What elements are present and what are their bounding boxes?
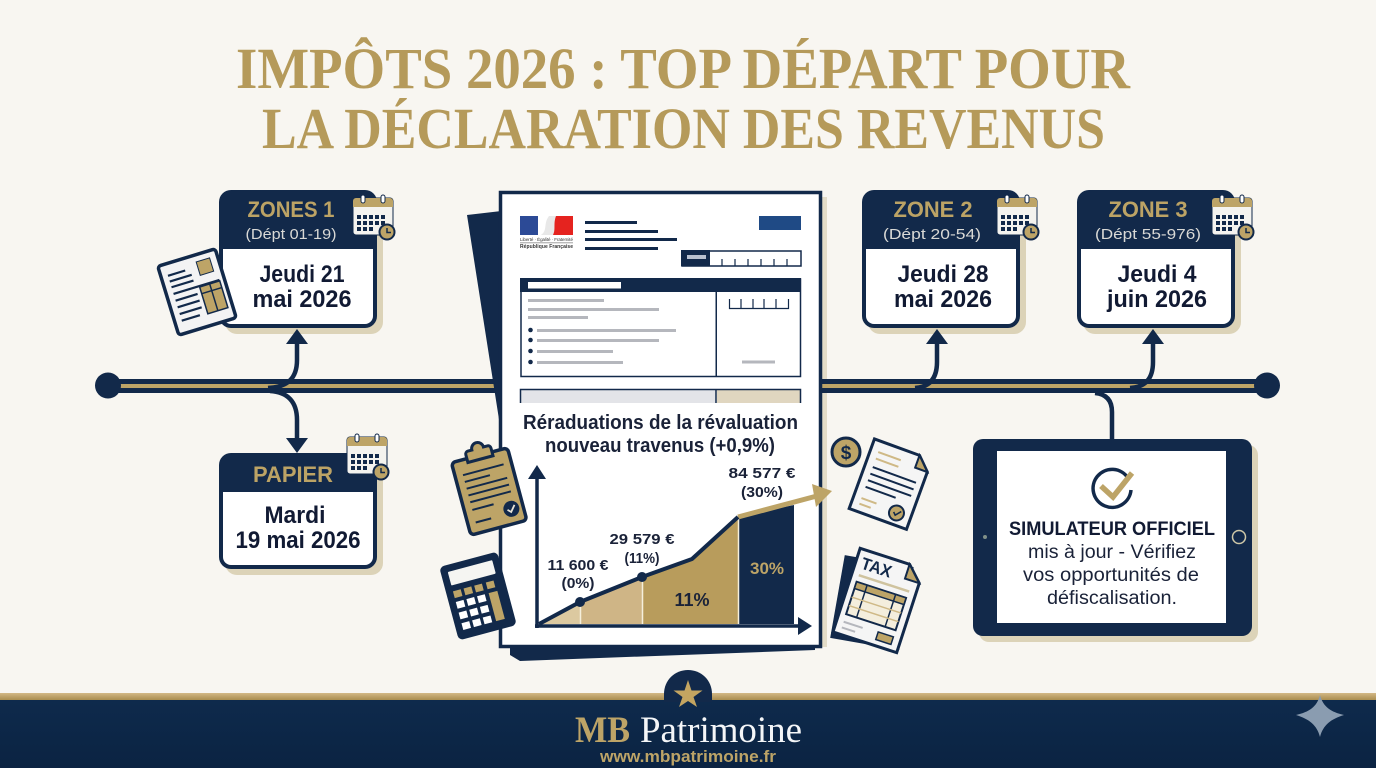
icon: calendar zone 3 xyxy=(1212,195,1254,240)
connector: timeline to simulator xyxy=(1095,393,1112,440)
icon: dollar coin: $ xyxy=(841,443,852,464)
card: zone 1: Jeudi 21 xyxy=(260,261,344,288)
simulator text: vos opportunités de xyxy=(1023,565,1199,586)
card: paper date: Mardi xyxy=(264,502,326,529)
card: paper date xyxy=(219,453,383,575)
card: zone 3: juin 2026 xyxy=(1106,286,1207,313)
simulator text: défiscalisation. xyxy=(1047,588,1177,609)
tax bracket chart: (11%) xyxy=(624,550,660,567)
chart title: nouveau travenus (+0,9%) xyxy=(545,435,775,457)
tax bracket chart: 30% xyxy=(750,559,784,578)
tax bracket chart: (0%) xyxy=(562,575,595,592)
title: LA DÉCLARATION DES REVENUS xyxy=(262,96,1105,161)
arrow: timeline to paper date xyxy=(270,391,308,453)
icon: newspaper document xyxy=(158,249,236,335)
card: zone 2: Jeudi 28 xyxy=(898,261,988,288)
website: www.mbpatrimoine.fr xyxy=(599,747,776,766)
card: zone 2: mai 2026 xyxy=(894,286,992,313)
card: zone 3: ZONE 3 xyxy=(1108,197,1188,222)
form lower table xyxy=(520,389,801,403)
chart title: Réraduations de la révaluation xyxy=(523,412,798,434)
simulator text: SIMULATEUR OFFICIEL xyxy=(1009,519,1215,540)
arrow: timeline to zone 3 xyxy=(1130,329,1164,388)
arrow: timeline to zone 2 xyxy=(915,329,948,388)
brand name: Patrimoine xyxy=(640,710,802,751)
chart title xyxy=(523,412,798,457)
document shadow xyxy=(822,197,827,647)
tax bracket chart: 84 577 € xyxy=(728,465,796,482)
icon: star badge xyxy=(664,670,712,707)
tax bracket chart: 11 600 € xyxy=(548,557,609,574)
card: paper date: PAPIER xyxy=(253,462,333,487)
simulator text xyxy=(1009,519,1215,609)
card: zone 1: (Dépt 01-19) xyxy=(246,226,336,243)
icon: certified document xyxy=(849,439,932,529)
icon: calendar zone 2 xyxy=(997,195,1038,240)
tax bracket chart: 29 579 € xyxy=(610,531,675,548)
icon: check mark xyxy=(1093,469,1132,507)
card: zone 2 xyxy=(862,190,1026,334)
icon: tax sheet xyxy=(819,544,925,659)
icon: calculator xyxy=(439,552,517,640)
card: zone 3 xyxy=(1077,190,1241,334)
form table xyxy=(520,278,801,377)
card: zone 1: mai 2026 xyxy=(252,286,352,313)
panel: simulator tablet xyxy=(973,439,1258,642)
icon: clipboard xyxy=(448,435,527,535)
icon: calendar zone 1 xyxy=(353,195,394,240)
card: zone 3: Jeudi 4 xyxy=(1118,261,1197,288)
panel: tax form document xyxy=(467,192,832,661)
arrow: timeline to zone 1 xyxy=(268,329,308,388)
card: zone 3: (Dépt 55-976) xyxy=(1095,226,1201,243)
footer xyxy=(0,670,1376,768)
timeline xyxy=(95,372,1280,398)
card: zone 1: ZONES 1 xyxy=(248,197,334,222)
tax bracket chart: 11% xyxy=(674,590,710,610)
title xyxy=(236,36,1131,161)
form header with logo: République Française xyxy=(520,244,573,250)
icon: tax sheet: TAX xyxy=(859,554,895,582)
card: zone 2: ZONE 2 xyxy=(894,197,972,222)
tax bracket chart: (30%) xyxy=(741,484,783,501)
card: zone 1 xyxy=(219,190,383,334)
back sheet xyxy=(467,210,815,661)
form header with logo xyxy=(520,216,801,266)
card: paper date: 19 mai 2026 xyxy=(236,527,360,554)
tax bracket chart xyxy=(528,465,832,635)
icon: dollar coin xyxy=(832,438,860,466)
simulator text: mis à jour - Vérifiez xyxy=(1028,542,1196,563)
brand name: MB xyxy=(575,710,630,751)
icon: sparkle xyxy=(1296,695,1344,737)
form header with logo: Liberté · Égalité · Fraternité xyxy=(520,236,573,242)
icon: calendar paper xyxy=(347,434,388,480)
card: zone 2: (Dépt 20-54) xyxy=(883,226,981,243)
title: IMPÔTS 2026 : TOP DÉPART POUR xyxy=(236,36,1131,101)
